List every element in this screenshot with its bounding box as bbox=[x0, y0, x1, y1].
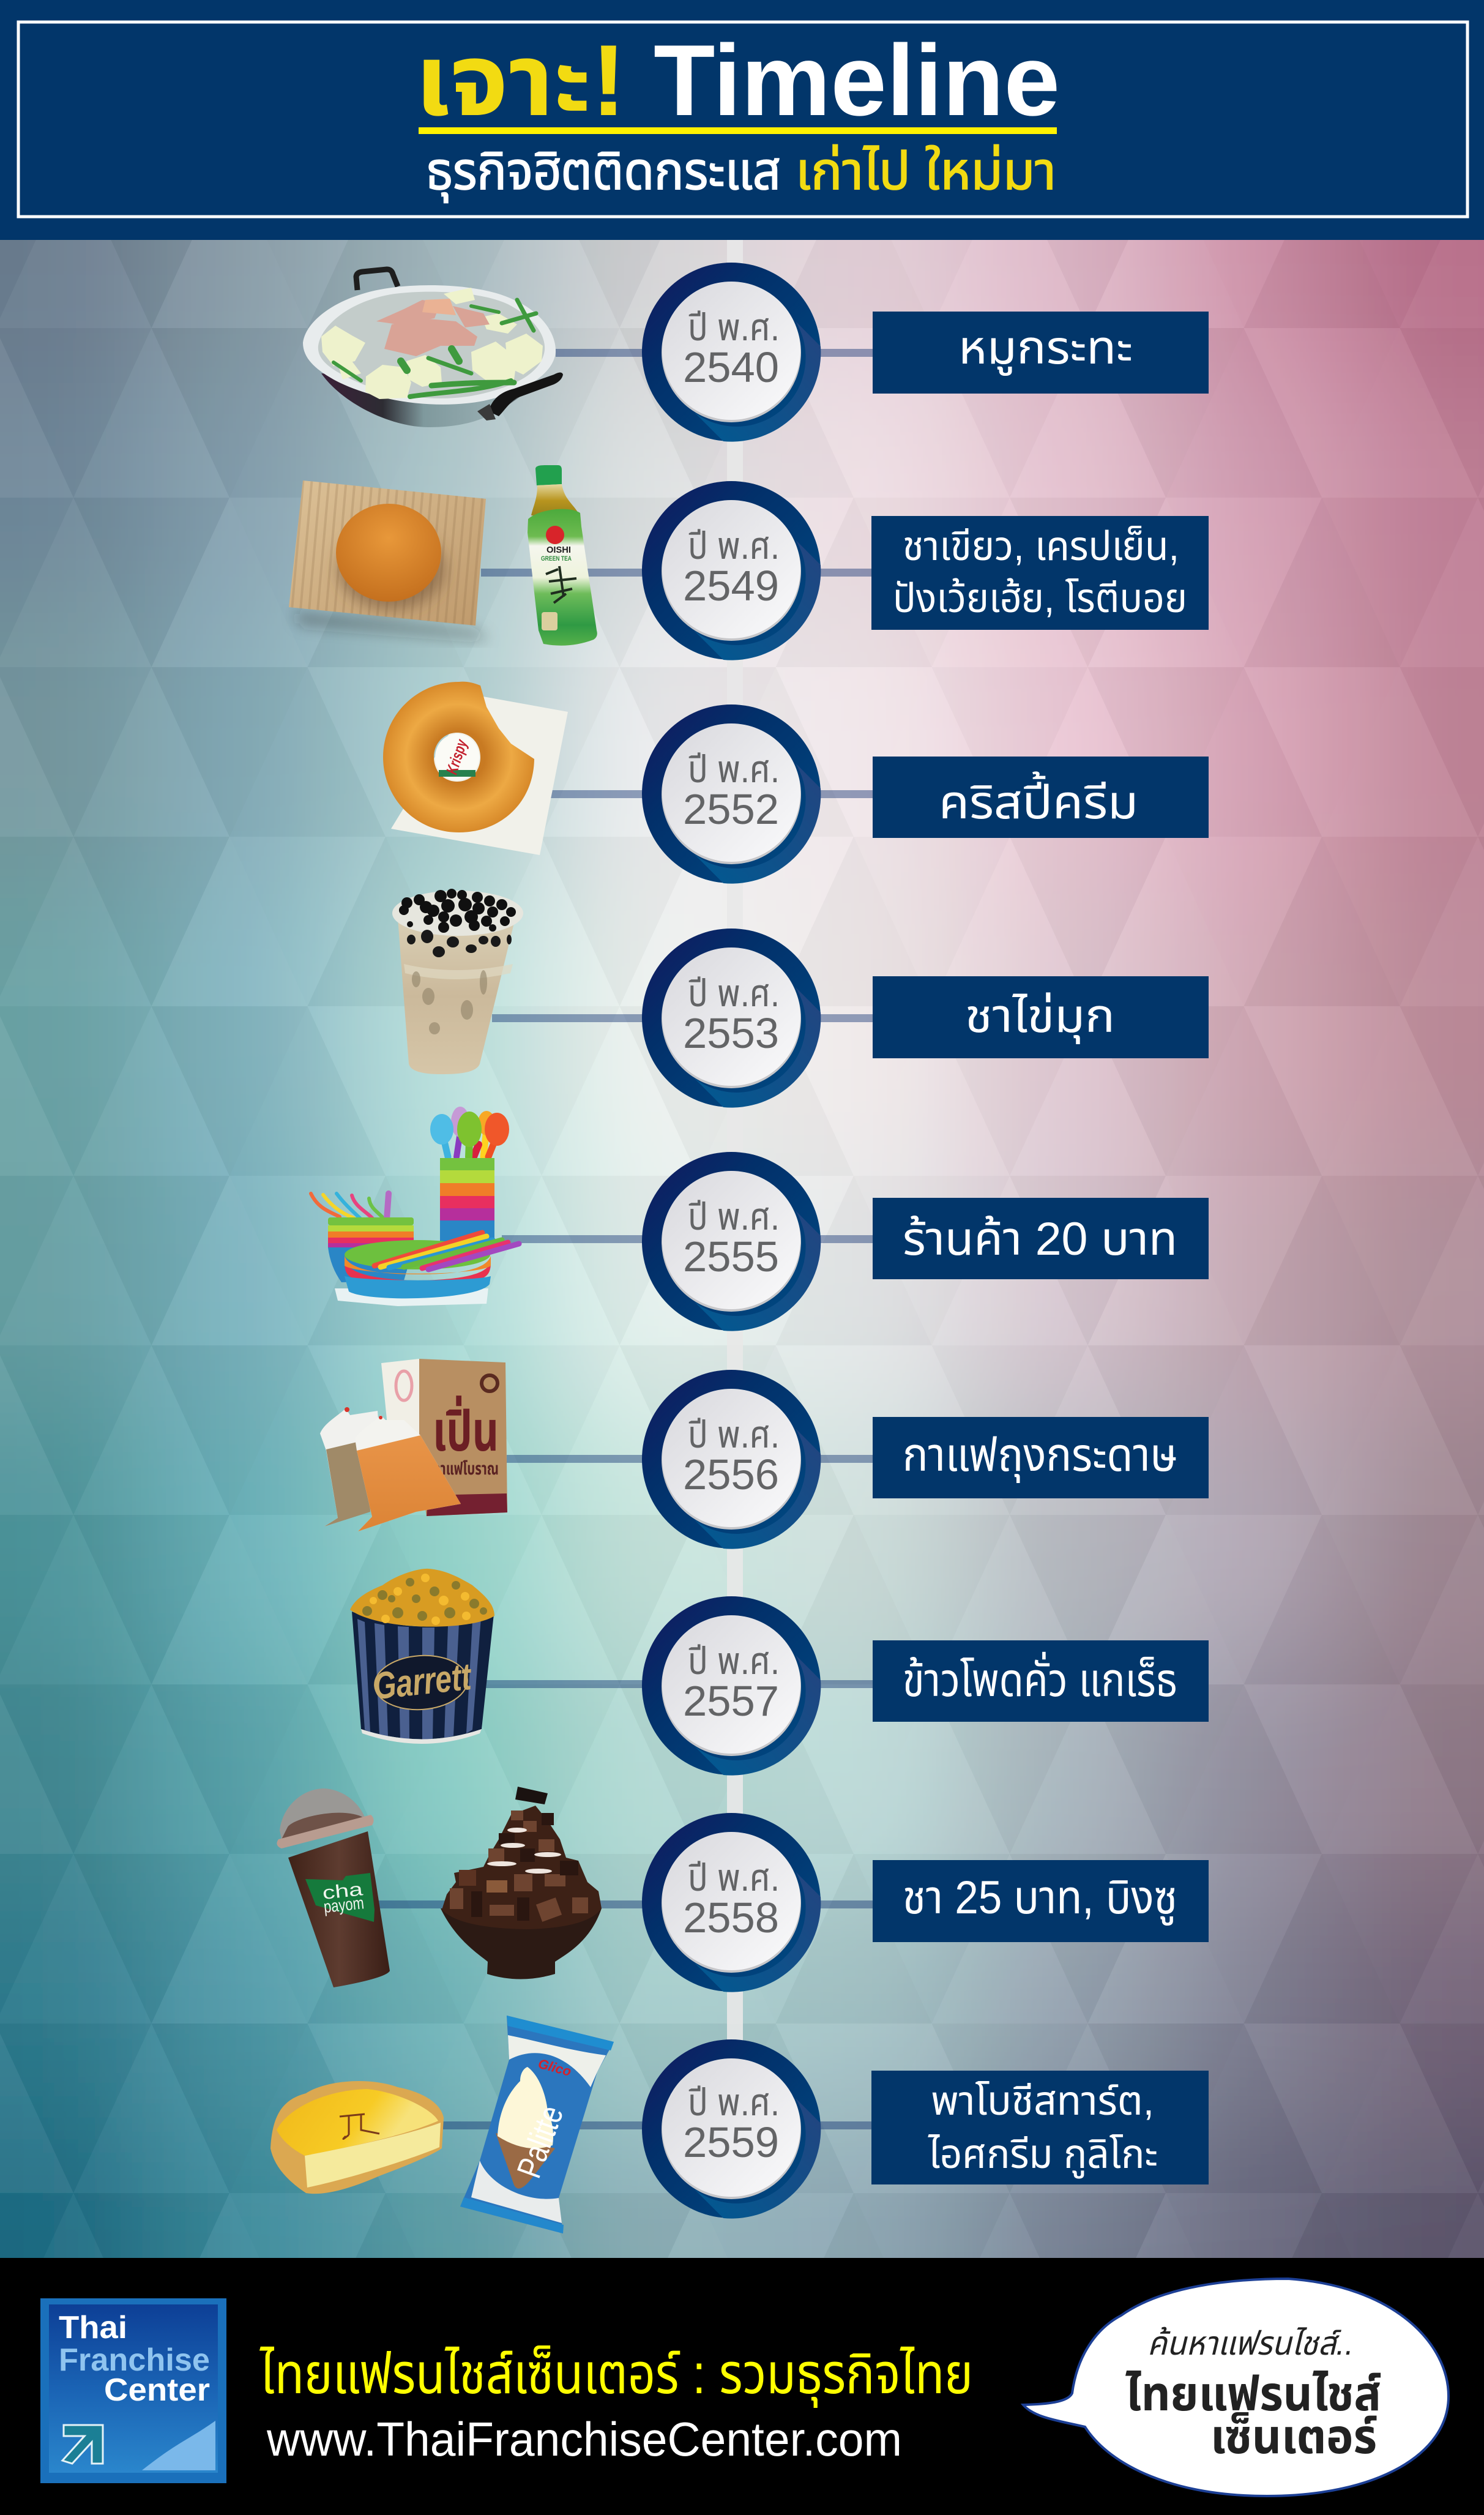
item 2552: year badge: 2552 bbox=[683, 785, 779, 833]
item 2553: label bbox=[873, 976, 1209, 1058]
icon: green tea bottle: OISHI bbox=[546, 545, 571, 555]
icon: cha payom cup bbox=[277, 1788, 390, 1987]
item 2558: label: ชา 25 บาท, บิงซู bbox=[903, 1872, 1177, 1926]
item 2549: label: ปังเว้ยเฮ้ย, โรตีบอย bbox=[893, 575, 1187, 621]
speech bubble bbox=[1023, 2279, 1449, 2496]
icon: cha payom cup: cha bbox=[321, 1879, 364, 1904]
title underline bbox=[419, 127, 1057, 134]
item 2552: year badge: ปี พ.ศ. bbox=[688, 749, 780, 791]
item 2556: label: กาแฟถุงกระดาษ bbox=[903, 1429, 1177, 1483]
subtitle: ธุรกิจฮิตติดกระแส bbox=[426, 142, 781, 203]
subtitle: เก่าไป ใหม่มา bbox=[796, 142, 1056, 201]
header banner bbox=[0, 0, 1484, 240]
icon: Pablo cheese tart bbox=[270, 2081, 444, 2194]
item 2557: year badge: ปี พ.ศ. bbox=[688, 1640, 780, 1683]
icon: green tea bottle bbox=[528, 465, 597, 646]
item 2556: year badge: ปี พ.ศ. bbox=[688, 1414, 780, 1456]
icon: logo arrow bbox=[62, 2425, 103, 2464]
item 2549: label: ชาเขียว, เครปเย็น, bbox=[903, 523, 1179, 569]
icon: green tea bottle: GREEN TEA bbox=[541, 555, 572, 562]
icon: Garrett popcorn tin: Garrett bbox=[371, 1656, 474, 1708]
item 2553: year badge bbox=[642, 929, 821, 1108]
item 2553: label: ชาไข่มุก bbox=[965, 990, 1115, 1044]
footer logo: Franchise bbox=[59, 2342, 210, 2378]
item 2555: year badge: 2555 bbox=[683, 1233, 779, 1280]
title: เจาะ! bbox=[415, 24, 626, 136]
item 2555: label bbox=[873, 1198, 1209, 1279]
icon: coffee bags and box bbox=[320, 1359, 507, 1531]
item 2559: label bbox=[871, 2071, 1209, 2184]
footer logo: Center bbox=[104, 2372, 210, 2408]
item 2540: year badge: 2540 bbox=[683, 343, 779, 391]
icon: Krispy Kreme donut bbox=[383, 682, 568, 855]
item 2557: year badge bbox=[642, 1596, 821, 1776]
item 2558: year badge: 2558 bbox=[683, 1894, 779, 1941]
item 2557: year badge: 2557 bbox=[683, 1677, 779, 1725]
item 2549: year badge: ปี พ.ศ. bbox=[688, 525, 780, 567]
item 2555: year badge: ปี พ.ศ. bbox=[688, 1196, 780, 1238]
item 2553: year badge: ปี พ.ศ. bbox=[688, 973, 780, 1015]
icon: Glico Palette ice cream pack: Palitte bbox=[509, 2101, 570, 2183]
icon: Garrett popcorn tin bbox=[350, 1569, 494, 1744]
icon: Krispy Kreme donut: Krispy bbox=[442, 736, 471, 777]
item 2540: label: หมูกระทะ bbox=[958, 322, 1133, 376]
connector lines bbox=[379, 349, 873, 2129]
icon: plastic ware bbox=[311, 1107, 519, 1306]
item 2558: year badge: ปี พ.ศ. bbox=[688, 1857, 780, 1899]
item 2549: year badge bbox=[642, 481, 821, 660]
speech bubble: เซ็นเตอร์ bbox=[1210, 2410, 1377, 2464]
item 2558: year badge bbox=[642, 1813, 821, 1992]
speech bubble: ไทยแฟรนไชส์ bbox=[1125, 2367, 1381, 2421]
title bbox=[415, 24, 1060, 136]
footer logo: Thai bbox=[59, 2310, 127, 2345]
icon: moo kratha pan bbox=[303, 269, 563, 427]
item 2549: year badge: 2549 bbox=[683, 562, 779, 610]
item 2556: year badge: 2556 bbox=[683, 1451, 779, 1498]
item 2552: label bbox=[873, 757, 1209, 838]
icon: Glico Palette ice cream pack: Glico bbox=[537, 2056, 573, 2079]
footer band bbox=[0, 2258, 1484, 2515]
icon: cha payom cup: payom bbox=[323, 1893, 365, 1916]
footer url: www.ThaiFranchiseCenter.com bbox=[266, 2412, 902, 2466]
item 2559: label: ไอศกรีม กูลิโกะ bbox=[928, 2131, 1158, 2179]
speech bubble: ค้นหาแฟรนไชส์.. bbox=[1147, 2325, 1354, 2362]
item 2556: label bbox=[873, 1417, 1209, 1498]
icon: coffee bags and box: กาแฟโบราณ bbox=[433, 1459, 499, 1478]
item 2549: label bbox=[871, 516, 1209, 630]
item 2540: label bbox=[873, 312, 1209, 394]
icon: bun on wood board bbox=[289, 480, 490, 640]
item 2557: label: ข้าวโพดคั่ว แกเร็ธ bbox=[903, 1651, 1177, 1706]
icon: chocolate bingsu bbox=[441, 1787, 602, 1979]
footer logo bbox=[40, 2298, 226, 2483]
item 2559: label: พาโบชีสทาร์ต, bbox=[931, 2078, 1154, 2123]
item 2552: year badge bbox=[642, 704, 821, 884]
item 2555: label: ร้านค้า 20 บาท bbox=[903, 1213, 1177, 1265]
item 2553: year badge: 2553 bbox=[683, 1009, 779, 1057]
icon: Glico Palette ice cream pack bbox=[460, 2016, 614, 2233]
item 2540: year badge bbox=[642, 263, 821, 442]
icon: bubble milk tea bbox=[392, 889, 523, 1074]
item 2559: year badge bbox=[642, 2039, 821, 2219]
item 2559: year badge: 2559 bbox=[683, 2118, 779, 2166]
item 2558: label bbox=[873, 1860, 1209, 1942]
subtitle bbox=[426, 142, 1056, 203]
item 2552: label: คริสปี้ครีม bbox=[939, 771, 1138, 829]
timeline spine bbox=[727, 240, 743, 2046]
footer headline: ไทยแฟรนไชส์เซ็นเตอร์ : รวมธุรกิจไทย bbox=[259, 2343, 973, 2408]
icon: coffee bags and box: เปิ่น bbox=[433, 1395, 499, 1463]
item 2540: year badge: ปี พ.ศ. bbox=[688, 307, 780, 349]
item 2557: label bbox=[873, 1640, 1209, 1722]
item 2559: year badge: ปี พ.ศ. bbox=[688, 2082, 780, 2124]
item 2556: year badge bbox=[642, 1370, 821, 1549]
item 2555: year badge bbox=[642, 1152, 821, 1331]
title: Timeline bbox=[654, 24, 1060, 136]
